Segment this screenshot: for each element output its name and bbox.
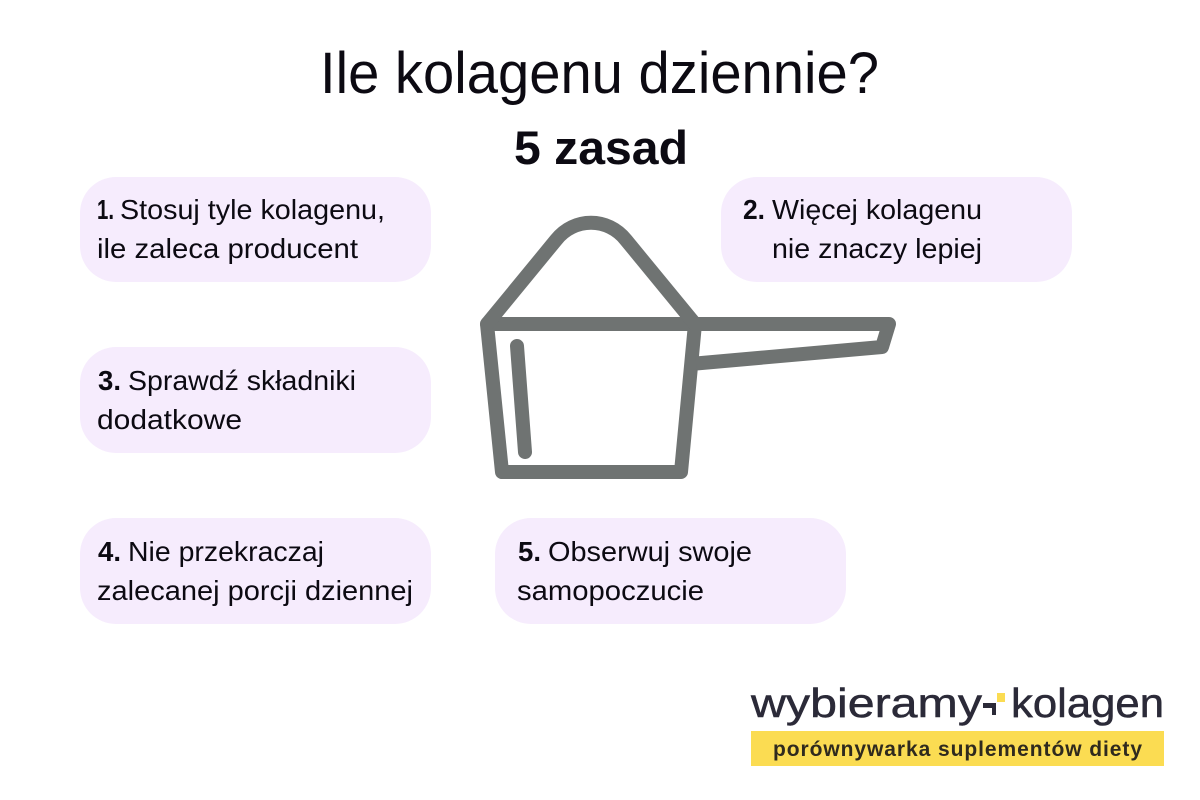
panel: rule 3: Sprawdź składniki — [128, 365, 356, 396]
logo: wybieramy kolagen: wybieramy — [750, 680, 983, 726]
panel: rule 1: 1. — [97, 194, 114, 225]
panel: rule 3 — [80, 347, 431, 453]
panel: rule 4: Nie przekraczaj — [128, 536, 324, 567]
panel: rule 3: dodatkowe — [97, 404, 242, 435]
panel: rule 2: 2. — [743, 194, 765, 225]
panel: rule 1 — [80, 177, 431, 282]
panel: rule 5: Obserwuj swoje — [548, 536, 752, 567]
panel: rule 5: 5. — [518, 536, 541, 567]
logo: wybieramy kolagen — [750, 680, 1164, 766]
panel: rule 4 — [80, 518, 431, 624]
logo: wybieramy kolagen: porównywarka suplementów diety — [773, 738, 1142, 761]
panel: rule 5 — [495, 518, 846, 624]
panel: rule 4: 4. — [98, 536, 121, 567]
logo: wybieramy kolagen: kolagen — [1011, 680, 1164, 726]
panel: rule 3: 3. — [98, 365, 121, 396]
subtitle: 5 zasad — [514, 121, 688, 174]
panel: rule 1: ile zaleca producent — [97, 233, 358, 264]
title: Ile kolagenu dziennie? — [320, 41, 879, 106]
panel: rule 4: zalecanej porcji dziennej — [97, 575, 413, 606]
icon: collagen scoop — [487, 223, 889, 472]
panel: rule 1: Stosuj tyle kolagenu, — [120, 194, 385, 225]
panel: rule 2 — [721, 177, 1072, 282]
panel: rule 5: samopoczucie — [517, 575, 704, 606]
panel: rule 2: Więcej kolagenu — [772, 194, 982, 225]
panel: rule 2: nie znaczy lepiej — [772, 233, 982, 264]
